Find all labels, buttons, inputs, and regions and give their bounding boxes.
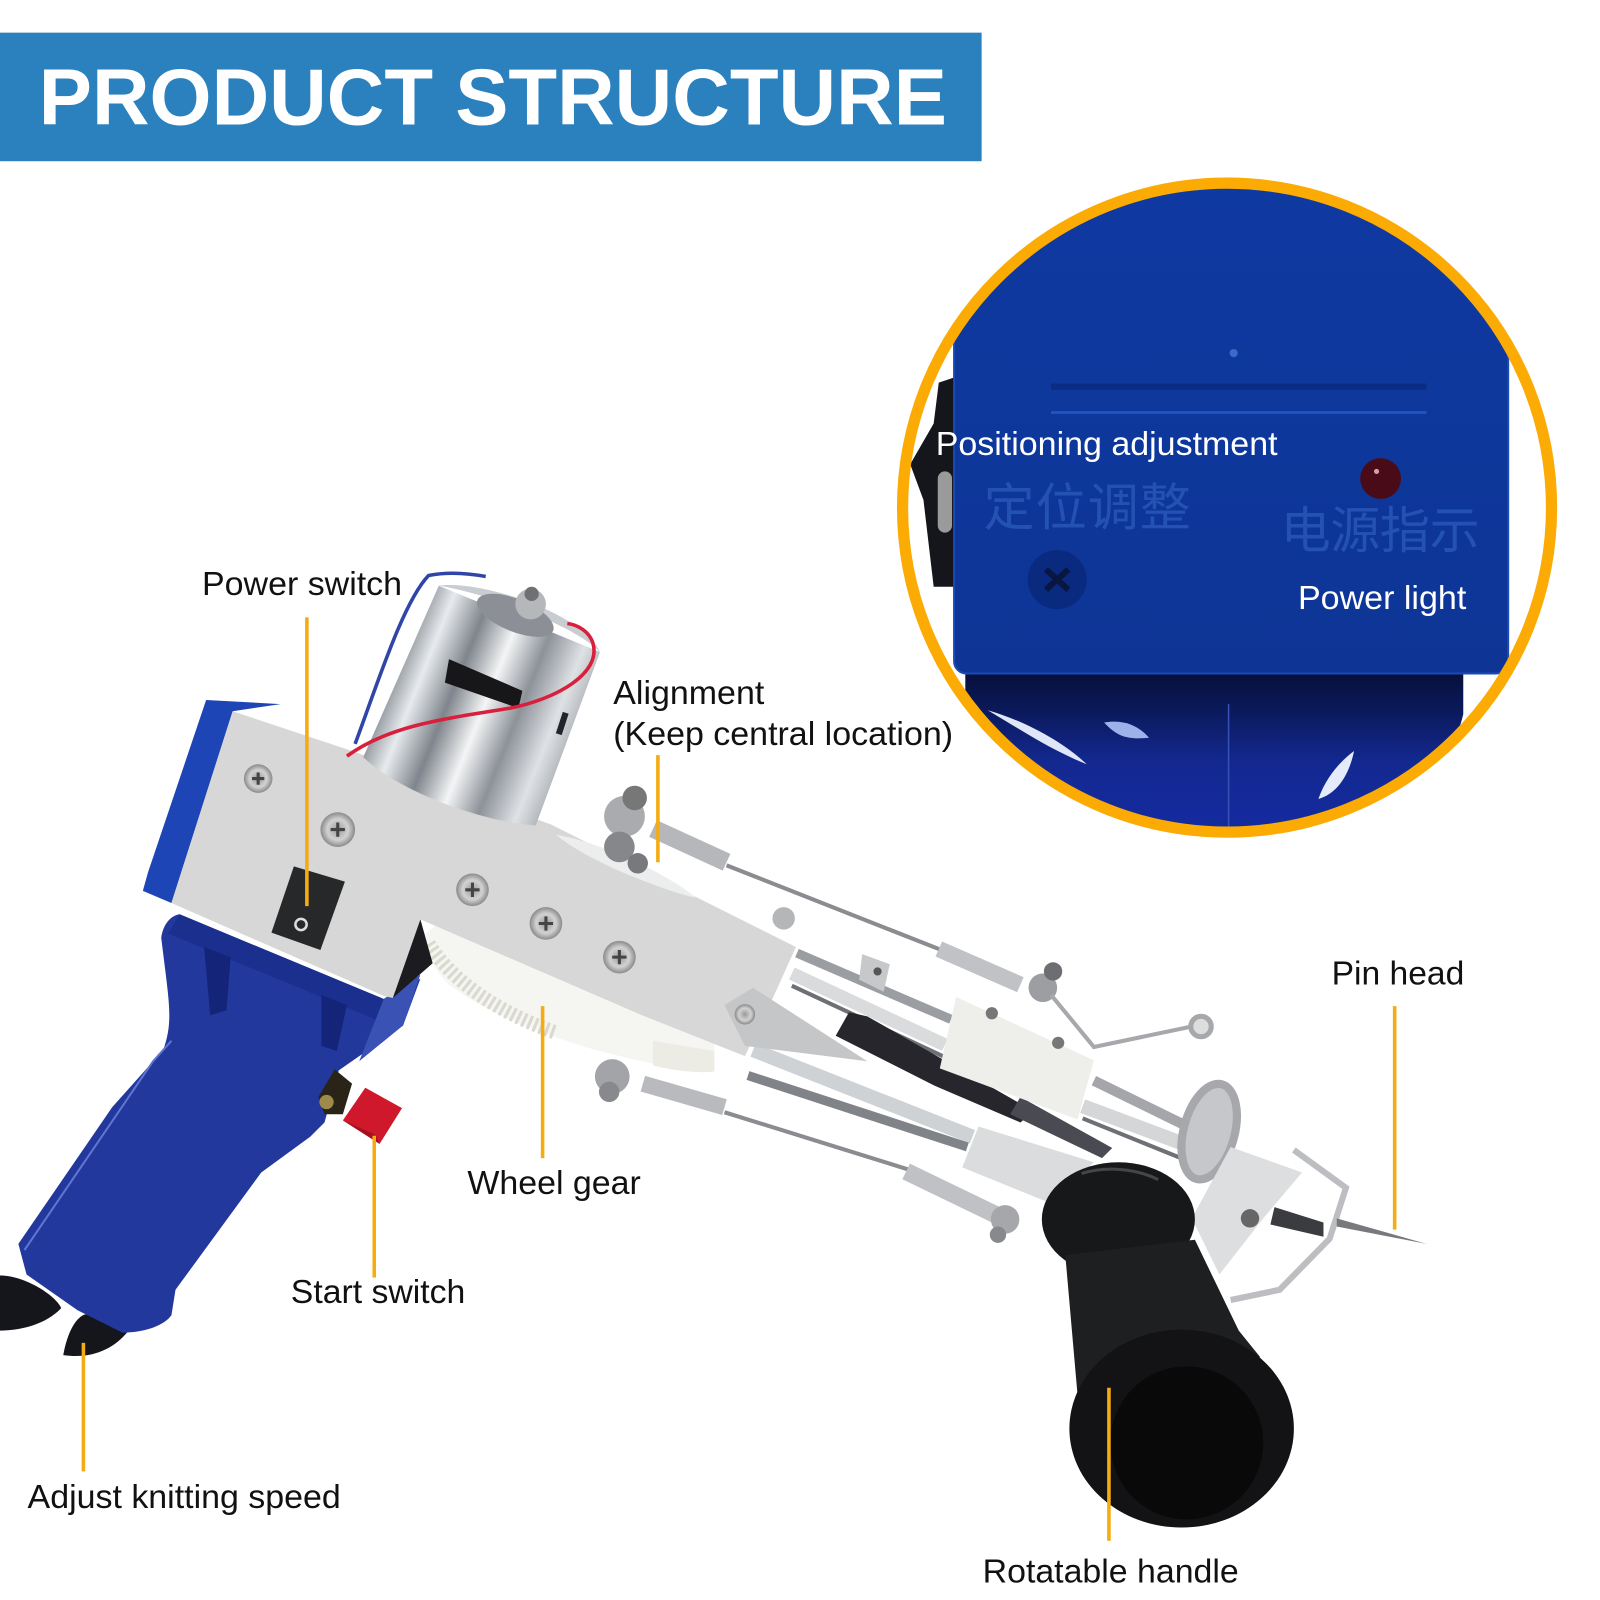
rocker switch	[271, 866, 345, 950]
callout: adjust knitting speed: Adjust knitting speed	[28, 1479, 341, 1516]
gray head body	[143, 700, 796, 1056]
power cords	[0, 1276, 129, 1356]
adjustment hole	[1028, 550, 1087, 609]
callout: start switch	[291, 1136, 465, 1311]
wheel gear	[426, 923, 714, 1072]
label: power light: Power light	[1298, 580, 1467, 617]
motor	[363, 585, 600, 826]
needle head and flange	[1172, 1078, 1427, 1300]
callout: power switch: Power switch	[202, 566, 402, 603]
callout: rotatable handle: Rotatable handle	[983, 1554, 1239, 1591]
tufting gun illustration	[0, 573, 1427, 1528]
callout: adjust knitting speed	[28, 1343, 341, 1516]
rotatable black handle	[1042, 1162, 1294, 1528]
inset zoom circle: control box close-up	[902, 133, 1553, 847]
title banner	[0, 33, 982, 161]
handle grip	[18, 914, 420, 1333]
callout: power switch	[202, 566, 402, 906]
title banner: PRODUCT STRUCTURE	[39, 52, 947, 141]
embossed caption left: 定位调整	[984, 480, 1191, 537]
start button	[318, 1069, 402, 1144]
callout: pin head: Pin head	[1332, 956, 1464, 993]
callout: start switch: Start switch	[291, 1274, 465, 1311]
motor wires	[347, 573, 594, 756]
lower housing	[965, 674, 1464, 826]
orange ring	[903, 183, 1552, 832]
embossed caption right: 电源指示	[1281, 503, 1480, 559]
callout: alignment: Alignment	[613, 675, 765, 712]
toggle lever	[910, 378, 954, 587]
callout: rotatable handle	[983, 1388, 1239, 1591]
needle bars and carriage	[724, 907, 1198, 1203]
callout: alignment	[613, 675, 953, 862]
callout: wheel gear: Wheel gear	[467, 1165, 641, 1202]
callout: pin head	[1332, 956, 1464, 1230]
callout: wheel gear	[467, 1006, 641, 1202]
callout: alignment: (Keep central location)	[613, 716, 953, 753]
control box front	[954, 133, 1508, 673]
upper tie rod	[604, 786, 1211, 1047]
label: positioning adjustment: Positioning adjustment	[936, 426, 1278, 463]
lower tie rod	[595, 1059, 1019, 1243]
power led	[1360, 458, 1401, 499]
screws	[244, 764, 636, 973]
